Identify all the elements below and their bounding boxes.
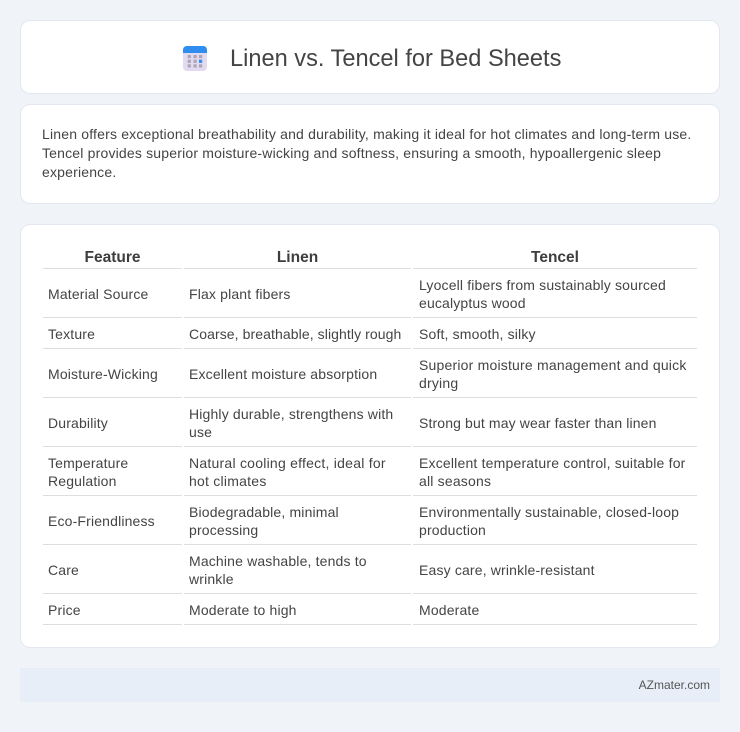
row: Material Source: Material Source — [48, 286, 148, 302]
comparison table: Environmentally sustainable, closed-loop — [419, 504, 679, 520]
panel: comparison table card — [20, 224, 720, 648]
comparison table: Flax plant fibers — [189, 286, 291, 302]
comparison table: Moderate — [419, 602, 479, 618]
panel: title card — [20, 20, 720, 94]
row: Care: Care — [48, 562, 79, 578]
comparison table: all seasons — [419, 473, 491, 489]
icon: calendar — [183, 46, 207, 71]
comparison table: Easy care, wrinkle-resistant — [419, 562, 595, 578]
comparison table: Machine washable, tends to — [189, 553, 367, 569]
column header: Tencel: Tencel — [531, 249, 579, 266]
summary text: Linen offers exceptional breathability and durability, making it ideal for hot climates and long-term use. — [42, 126, 691, 142]
row: Price: Price — [48, 602, 81, 618]
row: Eco-Friendliness: Eco-Friendliness — [48, 513, 155, 529]
comparison table: Excellent moisture absorption — [189, 366, 377, 382]
title: Linen vs. Tencel for Bed Sheets — [230, 46, 561, 72]
row: Temperature Regulation — [48, 455, 128, 489]
column header: Linen: Linen — [277, 249, 318, 266]
comparison table: eucalyptus wood — [419, 295, 526, 311]
row: Temperature Regulation: Temperature — [48, 455, 128, 471]
comparison table: hot climates — [189, 473, 267, 489]
column header: Feature: Feature — [84, 249, 140, 266]
comparison table: processing — [189, 522, 258, 538]
panel: summary card — [20, 104, 720, 204]
row: Durability: Durability — [48, 415, 108, 431]
comparison table: Highly durable, strengthens with — [189, 406, 393, 422]
comparison table: drying — [419, 375, 458, 391]
comparison table: use — [189, 424, 212, 440]
comparison table: Superior moisture management and quick — [419, 357, 687, 373]
footer bar — [20, 668, 720, 702]
row: Temperature Regulation: Regulation — [48, 473, 117, 489]
comparison table: Soft, smooth, silky — [419, 326, 536, 342]
summary text: Tencel provides superior moisture-wicking and softness, ensuring a smooth, hypoallergenic sleep — [42, 145, 661, 161]
comparison table: Lyocell fibers from sustainably sourced — [419, 277, 666, 293]
row: Texture: Texture — [48, 326, 95, 342]
comparison table: Biodegradable, minimal — [189, 504, 339, 520]
summary text: experience. — [42, 164, 116, 180]
summary text — [42, 126, 691, 180]
comparison table: Natural cooling effect, ideal for — [189, 455, 386, 471]
row: Moisture-Wicking: Moisture-Wicking — [48, 366, 158, 382]
comparison table: wrinkle — [189, 571, 234, 587]
comparison table: Moderate to high — [189, 602, 297, 618]
comparison table: Coarse, breathable, slightly rough — [189, 326, 401, 342]
footer credit: AZmater.com — [639, 678, 710, 692]
comparison table: Strong but may wear faster than linen — [419, 415, 656, 431]
comparison table: Excellent temperature control, suitable for — [419, 455, 686, 471]
comparison table: production — [419, 522, 486, 538]
